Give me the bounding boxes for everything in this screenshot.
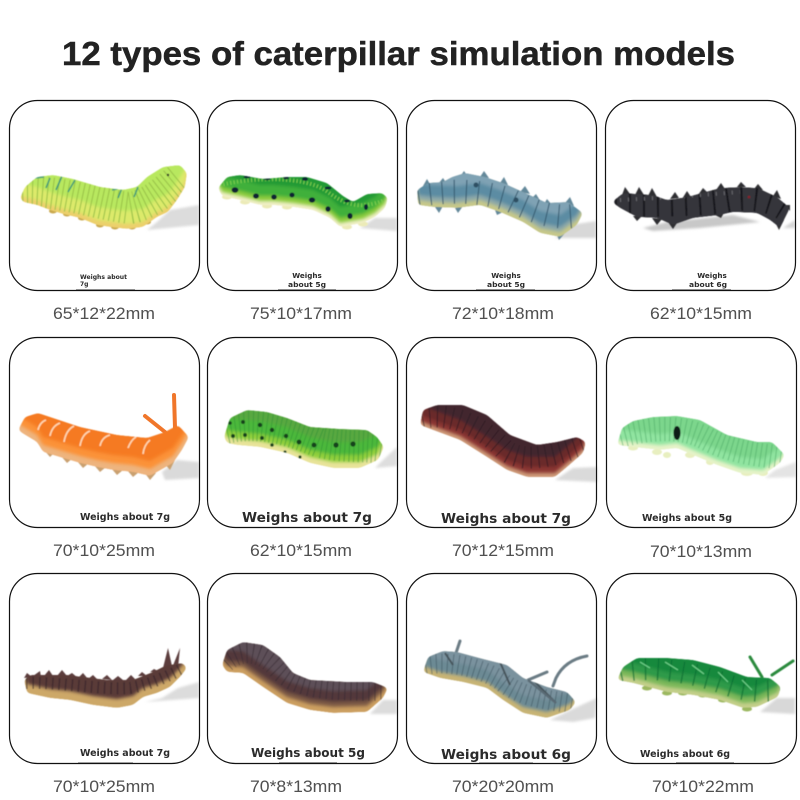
panel: caterpillar 6 (208, 338, 398, 560)
panel: caterpillar 11 (406, 574, 597, 796)
card outline 6 (208, 338, 398, 528)
scale bar 12 (676, 762, 734, 764)
caterpillar model 6 (224, 410, 384, 468)
shadow 7 (555, 467, 597, 482)
caterpillar model 4 (612, 182, 790, 230)
panel: caterpillar 1 (10, 100, 200, 323)
spikes 3 (423, 171, 574, 240)
panel: caterpillar 3 (406, 100, 596, 323)
card outline 8 (606, 338, 796, 528)
panel: caterpillar 5 (10, 338, 200, 560)
dimensions 12: 70*10*22mm (652, 778, 754, 796)
weight label 3 (487, 271, 525, 289)
shadow 4 (643, 215, 795, 231)
legs 2 (222, 194, 368, 230)
panel: caterpillar 2 (208, 100, 398, 323)
dimensions 7: 70*12*15mm (452, 542, 554, 560)
caterpillar model 12 (618, 654, 796, 712)
caterpillar model 11 (423, 633, 587, 718)
scale bar 10 (279, 762, 337, 764)
card outline 5 (10, 338, 200, 528)
antennae 5 (145, 395, 175, 432)
shadow 6 (375, 447, 397, 468)
dimensions 8: 70*10*13mm (650, 543, 752, 561)
weight label 1: 7g (80, 281, 88, 288)
caterpillar model 3 (416, 170, 582, 240)
dimensions 10: 70*8*13mm (250, 778, 342, 796)
weight label 2: about 5g (288, 280, 326, 289)
shadow 8 (765, 462, 796, 478)
weight label 7: Weighs about 7g (441, 511, 571, 527)
dimensions 5: 70*10*25mm (53, 542, 155, 560)
panel: caterpillar 8 (606, 338, 796, 561)
card outline 7 (406, 338, 596, 528)
card outline 3 (406, 100, 596, 290)
card outline 10 (208, 574, 398, 764)
weight label 2 (288, 271, 326, 289)
weight label 3: about 5g (487, 280, 525, 289)
caterpillar model 2 (218, 174, 388, 230)
card outline 12 (606, 574, 796, 764)
shadow 1 (147, 205, 199, 230)
caterpillar model 7 (420, 404, 586, 478)
weight label 4: Weighs (697, 271, 727, 280)
horns 11 (456, 641, 587, 686)
weight label 4: about 6g (689, 280, 727, 289)
legs 5 (44, 450, 175, 480)
shadow 12 (760, 698, 795, 714)
shadow 5 (162, 460, 199, 480)
weight label 5: Weighs about 7g (80, 512, 170, 523)
caterpillar model 9 (24, 648, 187, 708)
weight label 3: Weighs (491, 271, 521, 280)
weight label 1: Weighs about (80, 274, 127, 281)
shadow 2 (360, 218, 397, 231)
weight label 6: Weighs about 7g (242, 510, 372, 526)
panel: caterpillar 7 (406, 338, 597, 560)
caterpillar model 1 (20, 164, 188, 230)
panel: caterpillar 4 (606, 100, 796, 323)
scale bar 9 (78, 762, 133, 764)
scale bar 4 (672, 289, 731, 291)
horn overlay 11 (528, 680, 556, 703)
shadow 9 (145, 682, 199, 702)
weight label 4 (689, 271, 727, 289)
spikes and ears 9 (24, 648, 180, 680)
shadow 3 (555, 221, 596, 238)
card outline 4 (606, 100, 796, 290)
spikes 4 (622, 182, 790, 230)
dimensions 11: 70*20*20mm (452, 778, 554, 796)
panel: caterpillar 12 (606, 574, 796, 796)
caterpillar model 5 (18, 412, 188, 480)
weight label 2: Weighs (292, 271, 322, 280)
caterpillar model 8 (618, 415, 784, 476)
dimensions 2: 75*10*17mm (250, 305, 352, 323)
dimensions 4: 62*10*15mm (650, 305, 752, 323)
weight label 10: Weighs about 5g (251, 746, 365, 760)
title: 12 types of caterpillar simulation models (62, 36, 735, 73)
card outline 1 (10, 100, 200, 290)
scale bar 1 (76, 289, 135, 291)
dimensions 9: 70*10*25mm (53, 778, 155, 796)
panel: caterpillar 9 (10, 574, 200, 796)
weight label 11: Weighs about 6g (441, 747, 571, 763)
shadow 10 (370, 700, 397, 714)
weight label 12: Weighs about 6g (640, 749, 730, 760)
dimensions 1: 65*12*22mm (53, 305, 155, 323)
scale bar 2 (278, 289, 336, 291)
scale bar 11 (479, 762, 533, 764)
horns 12 (750, 657, 793, 677)
legs 8 (628, 446, 768, 476)
shadow 11 (550, 698, 597, 722)
weight label 1 (80, 274, 127, 288)
caterpillar model 10 (222, 642, 388, 714)
legs 1 (49, 208, 151, 230)
weight label 9: Weighs about 7g (80, 748, 170, 759)
card outline 11 (406, 574, 596, 764)
card outline 9 (10, 574, 200, 764)
card outline 2 (208, 100, 398, 290)
scale bar 3 (476, 289, 535, 291)
weight label 8: Weighs about 5g (642, 513, 732, 524)
dimensions 3: 72*10*18mm (452, 305, 554, 323)
panel: caterpillar 10 (208, 574, 398, 796)
legs 12 (642, 686, 752, 712)
dimensions 6: 62*10*15mm (250, 542, 352, 560)
